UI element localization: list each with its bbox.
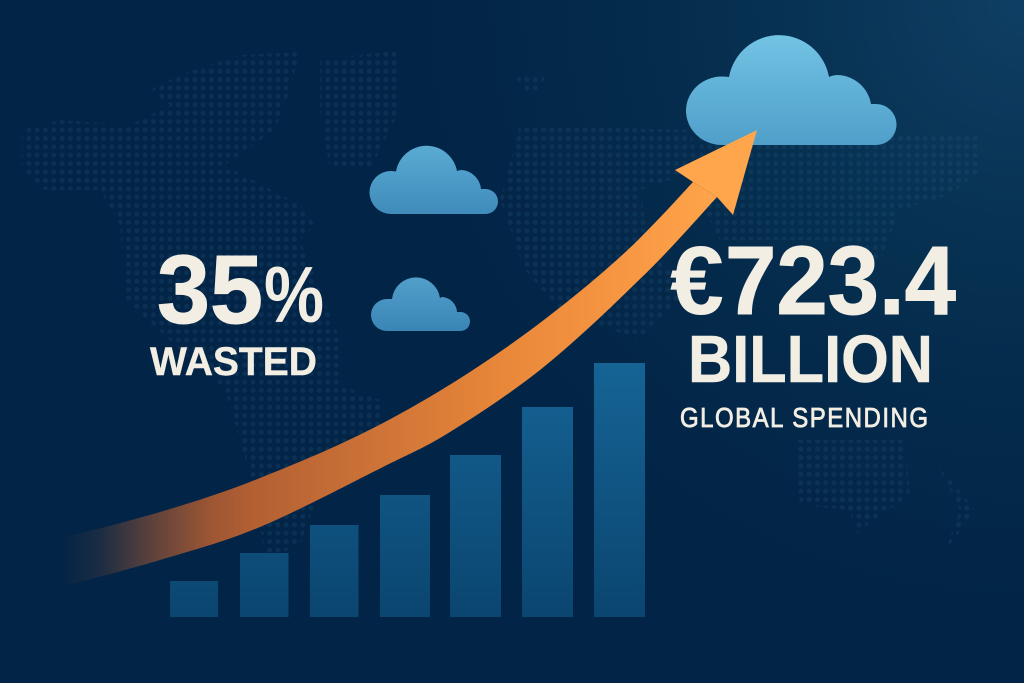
stat: global spending: BILLION bbox=[688, 322, 933, 397]
stat: 35% wasted: 35 bbox=[157, 235, 263, 344]
stat: global spending bbox=[670, 226, 956, 433]
stat: 35% wasted: % bbox=[264, 250, 324, 339]
dotted world map bbox=[22, 52, 978, 552]
arrow: rising trend bbox=[50, 130, 757, 590]
icon: small cloud bbox=[371, 277, 470, 331]
icon: large cloud bbox=[686, 35, 896, 145]
stat: global spending: GLOBAL SPENDING bbox=[680, 404, 928, 433]
stat: global spending: 723.4 bbox=[725, 226, 956, 335]
stat: global spending: € bbox=[670, 226, 724, 335]
bar chart bbox=[170, 363, 645, 617]
stat: 35% wasted: WASTED bbox=[150, 340, 317, 384]
icon: medium cloud bbox=[370, 146, 498, 214]
stat: 35% wasted bbox=[150, 235, 324, 384]
